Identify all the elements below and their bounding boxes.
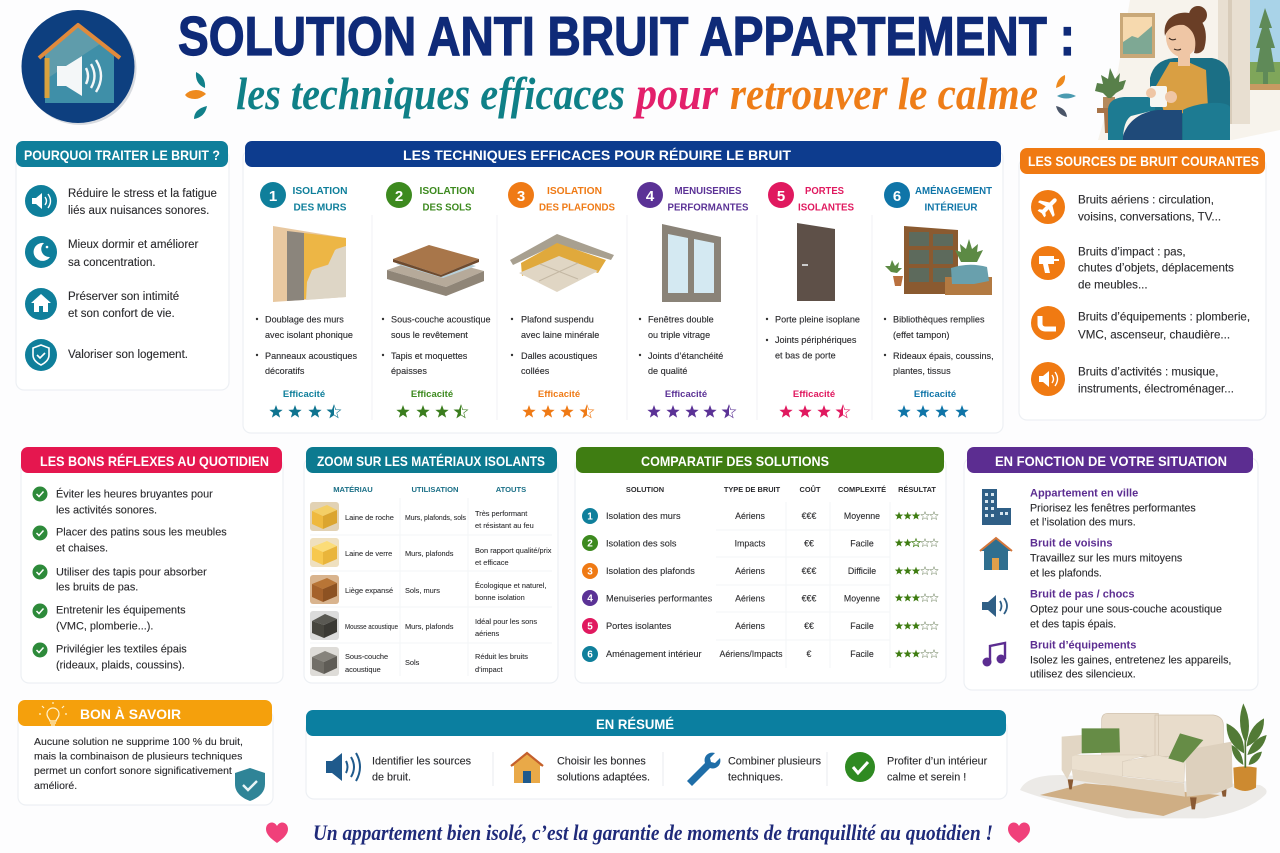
text: bruits impact: Bruits d’impact : pas, [1078, 246, 1186, 258]
technique 5: Efficacité [793, 389, 835, 400]
item: profiter: Profiter d’un intérieur [887, 756, 988, 768]
technique 2: DES SOLS [422, 202, 472, 214]
row 6: Aériens/Impacts [719, 649, 783, 659]
checklist: les bruits de pas. [56, 582, 138, 594]
technique 2: épaisses [391, 366, 427, 376]
panel: bons reflexes [21, 447, 283, 683]
item: combiner [687, 753, 822, 786]
table headers [626, 485, 936, 494]
heading [576, 447, 944, 473]
heading [18, 700, 272, 726]
text: bruits aeriens: voisins, conversations, TV... [1078, 210, 1221, 224]
icon: plane [1031, 190, 1065, 224]
subtitle [236, 68, 1038, 119]
panel: en fonction de votre situation [964, 447, 1258, 690]
technique 4: ou triple vitrage [648, 330, 710, 340]
item: bruit de pas: Bruit de pas / chocs [1030, 588, 1135, 600]
row 6: € [807, 649, 812, 659]
row 3: Aériens [735, 566, 766, 576]
row: sous-couche acoustique: acoustique [345, 665, 381, 674]
row 2: Impacts [735, 538, 766, 548]
technique 3: ISOLATION [547, 185, 602, 197]
panel: bon a savoir [18, 700, 273, 805]
icon: shield [25, 339, 57, 371]
item: bruit de voisins: et les plafonds. [1030, 568, 1102, 580]
row 1: Isolation des murs [606, 511, 681, 521]
technique 2: Sous-couche acoustique [391, 314, 491, 324]
icon: shield [235, 768, 265, 801]
item: appartement en ville: Priorisez les fenêtres performantes [1030, 502, 1196, 514]
text: stress: Réduire le stress et la fatigue [68, 188, 217, 200]
text: Aucune solution ne supprime 100 % du bruit, [34, 736, 243, 748]
checklist: Privilégier les textiles épais [56, 644, 187, 656]
heading: BON À SAVOIR [80, 706, 181, 722]
icon: bookcase, sofa and plant [885, 226, 992, 295]
row: laine de verre: Laine de verre [345, 549, 392, 558]
row 3: 3 [587, 566, 593, 578]
checklist: (rideaux, plaids, coussins). [56, 660, 185, 672]
row: sous-couche acoustique: Réduit les bruits [475, 652, 528, 661]
technique 1: ISOLATION [292, 185, 348, 197]
technique 6: Rideaux épais, coussins, [893, 351, 994, 361]
heading: POURQUOI TRAITER LE BRUIT ? [24, 147, 220, 163]
item: identifier: de bruit. [372, 772, 411, 784]
item: choisir [511, 753, 650, 784]
technique 2: Tapis et moquettes [391, 351, 468, 361]
text: bruits activites [1078, 366, 1234, 396]
row 1: Aériens [735, 511, 766, 521]
heading: EN RÉSUMÉ [596, 716, 674, 732]
item: bruit d'equipements [982, 640, 1231, 680]
row 3: €€€ [802, 566, 816, 576]
text: permet un confort sonore significativement [34, 765, 232, 777]
technique 1: décoratifs [265, 366, 305, 376]
subtitle: retrouver le calme [730, 68, 1038, 119]
checklist [32, 486, 227, 672]
row 5: Facile [850, 621, 874, 631]
row 5: 5 [587, 622, 593, 632]
row: laine de roche: et résistant au feu [475, 521, 534, 530]
text: bruits aeriens: Bruits aériens : circulation, [1078, 194, 1214, 206]
checklist: Entretenir les équipements [56, 604, 186, 616]
technique 6: (effet tampon) [893, 330, 949, 340]
technique 5: PORTES [805, 185, 844, 197]
icon: door [797, 223, 835, 301]
row: sous-couche acoustique: d’impact [475, 665, 503, 674]
technique 3: DES PLAFONDS [539, 202, 615, 214]
checklist: les activités sonores. [56, 504, 157, 516]
row 1: 1 [587, 512, 593, 522]
text: bruits impact: chutes d’objets, déplacements [1078, 262, 1234, 274]
item: combiner: techniques. [728, 772, 783, 784]
item: bruit d'equipements: Isolez les gaines, entretenez les appareils, [1030, 654, 1231, 666]
icon: heart right [1008, 822, 1030, 843]
technique 4: PERFORMANTES [668, 202, 748, 214]
text: bruits impact [1078, 246, 1234, 292]
row: sous-couche acoustique: Sous-couche [345, 652, 388, 661]
row 5: Portes isolantes [606, 621, 672, 631]
row 6 [582, 646, 938, 662]
panel: techniques efficaces [243, 141, 1003, 433]
panel: sources de bruit [1019, 148, 1266, 420]
technique 3: 3 [517, 188, 525, 205]
icon: pipe [1031, 306, 1065, 340]
icon: moon [25, 236, 57, 268]
heading [967, 447, 1253, 473]
technique 6: INTÉRIEUR [924, 200, 978, 214]
technique 3 [508, 182, 615, 418]
text: amélioré. [34, 780, 77, 792]
technique 4: 4 [646, 188, 655, 205]
item: bruit de voisins: Travaillez sur les murs mitoyens [1030, 552, 1182, 564]
panel: pourquoi traiter le bruit [16, 141, 229, 390]
technique 2: 2 [395, 188, 403, 205]
row 6: Facile [850, 649, 874, 659]
text: bruits activites: Bruits d’activités : musique, [1078, 366, 1218, 378]
icon: heart left [266, 822, 288, 843]
technique 4: de qualité [648, 366, 687, 376]
row: liege expanse: bonne isolation [475, 593, 525, 602]
item: identifier [326, 753, 472, 784]
technique 4 [637, 182, 748, 418]
table headers: RÉSULTAT [898, 485, 936, 494]
technique 6 [884, 182, 994, 418]
heading: ZOOM SUR LES MATÉRIAUX ISOLANTS [317, 453, 545, 469]
checklist: et chaises. [56, 542, 108, 554]
checklist: (VMC, plomberie...). [56, 620, 153, 632]
illustration: woman relaxing in armchair [1095, 0, 1280, 140]
row 4 [582, 590, 938, 606]
text [34, 736, 243, 792]
row: liege expanse: Écologique et naturel, [475, 581, 546, 590]
subtitle: pour [632, 68, 719, 119]
heading [245, 141, 1001, 167]
text: bruits aeriens [1078, 194, 1221, 224]
technique 6: Efficacité [914, 389, 956, 400]
row 6: 6 [587, 650, 593, 660]
row 6: Aménagement intérieur [606, 649, 702, 659]
row 5: €€ [804, 621, 814, 631]
item: bruit de voisins [980, 538, 1182, 580]
text: intimite: et son confort de vie. [68, 308, 175, 320]
row: liege expanse: Liège expansé [345, 586, 393, 595]
item: appartement en ville [982, 488, 1196, 528]
icon: speaker [1031, 362, 1065, 396]
row: liege expanse [310, 575, 546, 604]
technique 2: ISOLATION [420, 185, 474, 197]
technique 3: Plafond suspendu [521, 314, 594, 324]
text: sommeil [68, 239, 199, 269]
item: profiter [845, 752, 988, 784]
title: SOLUTION ANTI BRUIT APPARTEMENT : [178, 5, 1075, 67]
technique 5: Joints périphériques [775, 335, 857, 345]
table headers: ATOUTS [496, 485, 526, 494]
text: intimite: Préserver son intimité [68, 291, 179, 303]
technique 2: sous le revêtement [391, 330, 468, 340]
row 1 [582, 508, 938, 524]
row 1: €€€ [802, 511, 816, 521]
technique 3: Dalles acoustiques [521, 351, 598, 361]
heading [16, 141, 228, 167]
item: bruit de pas: et des tapis épais. [1030, 618, 1116, 630]
text: bruits equipements: Bruits d’équipements : plomberie, [1078, 310, 1250, 324]
row: liege expanse: Sols, murs [405, 586, 440, 595]
technique 2 [382, 182, 491, 418]
row 3 [582, 563, 938, 579]
row 5 [582, 618, 938, 634]
item: bruit d'equipements: utilisez des silencieux. [1030, 668, 1136, 680]
technique 1: Panneaux acoustiques [265, 351, 357, 361]
heading [21, 447, 282, 473]
heading: EN FONCTION DE VOTRE SITUATION [995, 453, 1227, 469]
row: sous-couche acoustique [310, 647, 528, 676]
row: mousse acoustique: Mousse acoustique [345, 622, 398, 631]
text: stress: liés aux nuisances sonores. [68, 205, 209, 217]
row: laine de roche: Laine de roche [345, 513, 394, 522]
technique 1: DES MURS [294, 202, 346, 214]
checklist: Placer des patins sous les meubles [56, 526, 227, 538]
row: laine de roche [310, 502, 534, 531]
row 3: Isolation des plafonds [606, 566, 695, 576]
table headers: COMPLEXITÉ [838, 485, 886, 494]
heading: LES BONS RÉFLEXES AU QUOTIDIEN [40, 453, 269, 469]
icon: house [25, 288, 57, 320]
row: laine de verre: et efficace [475, 558, 509, 567]
technique 6: AMÉNAGEMENT [915, 184, 993, 197]
technique 1 [256, 182, 357, 418]
technique 1: avec isolant phonique [265, 330, 353, 340]
heading [306, 447, 557, 473]
row 4: 4 [587, 594, 593, 604]
row: laine de verre: Bon rapport qualité/prix [475, 546, 552, 555]
table headers: MATÉRIAU [333, 485, 373, 494]
heading [1020, 148, 1265, 174]
panel: comparatif [575, 447, 946, 683]
row: laine de roche: Murs, plafonds, sols [405, 513, 466, 522]
item: choisir: solutions adaptées. [557, 772, 650, 784]
technique 6: Bibliothèques remplies [893, 314, 985, 324]
checklist: Éviter les heures bruyantes pour [56, 488, 213, 500]
technique 3: collées [521, 366, 550, 376]
technique 6: plantes, tissus [893, 366, 951, 376]
heading: LES TECHNIQUES EFFICACES POUR RÉDUIRE LE BRUIT [403, 147, 791, 163]
row 1: Moyenne [844, 511, 880, 521]
row: laine de verre: Murs, plafonds [405, 549, 454, 558]
technique 4: Fenêtres double [648, 314, 714, 324]
row: mousse acoustique: Idéal pour les sons [475, 617, 537, 626]
text: sommeil: sa concentration. [68, 257, 156, 269]
text: mais la combinaison de plusieurs techniques [34, 750, 242, 762]
icon: wall layers [273, 226, 346, 302]
item: bruit de pas: Optez pour une sous-couche acoustique [1030, 604, 1222, 616]
technique 5 [766, 182, 860, 418]
text: bruits impact: de meubles... [1078, 278, 1148, 292]
decorative sparks left and right of subtitle [185, 72, 1076, 119]
row 2: 2 [587, 538, 593, 550]
row 2: €€ [804, 538, 814, 548]
row: mousse acoustique [310, 611, 537, 640]
technique 3: Efficacité [538, 389, 580, 400]
heading [306, 710, 1006, 736]
technique 4: Joints d’étanchéité [648, 351, 723, 361]
icon: lightbulb [39, 702, 67, 725]
item: combiner: Combiner plusieurs [728, 756, 822, 768]
technique 5: ISOLANTES [798, 202, 854, 214]
technique 5: 5 [777, 188, 785, 205]
row 4: Moyenne [844, 594, 880, 604]
item: profiter: calme et serein ! [887, 772, 966, 784]
item: identifier: Identifier les sources [372, 756, 472, 768]
row: laine de verre [310, 538, 552, 567]
text: bruits equipements [1078, 310, 1250, 342]
table headers: COÛT [800, 485, 821, 494]
icon: window [662, 224, 721, 302]
technique 5: et bas de porte [775, 350, 836, 360]
technique 1: Doublage des murs [265, 314, 344, 324]
icon: ceiling [510, 234, 614, 292]
text: stress [68, 188, 217, 217]
icon: drill [1031, 246, 1065, 280]
item: appartement en ville: et l’isolation des murs. [1030, 516, 1136, 528]
row: mousse acoustique: Murs, plafonds [405, 622, 454, 631]
item: bruit de pas [982, 588, 1222, 630]
technique 6: 6 [893, 188, 901, 205]
row 4: €€€ [802, 594, 816, 604]
table headers: UTILISATION [411, 485, 459, 494]
heading: COMPARATIF DES SOLUTIONS [641, 453, 829, 469]
item: bruit de voisins: Bruit de voisins [1030, 538, 1113, 550]
table headers: TYPE DE BRUIT [724, 485, 781, 494]
technique 3: avec laine minérale [521, 330, 599, 340]
technique 4: Efficacité [665, 389, 707, 400]
illustration: sofa and plant [1020, 703, 1267, 818]
row: mousse acoustique: aériens [475, 629, 500, 638]
technique 1: Efficacité [283, 389, 325, 400]
row 2 [582, 535, 938, 551]
technique 1: 1 [269, 188, 277, 205]
row: laine de roche: Très performant [475, 509, 527, 518]
icon: floor layers [387, 245, 484, 296]
row: sous-couche acoustique: Sols [405, 658, 420, 667]
table headers [333, 485, 526, 494]
row 2: Facile [850, 538, 874, 548]
text: logement: Valoriser son logement. [68, 349, 188, 361]
panel: materiaux isolants [304, 447, 558, 683]
text: bruits activites: instruments, électroménager... [1078, 382, 1234, 396]
row 2: Isolation des sols [606, 538, 677, 548]
text: sommeil: Mieux dormir et améliorer [68, 239, 199, 251]
subtitle: les techniques efficaces [236, 68, 625, 119]
table headers: SOLUTION [626, 485, 664, 494]
row 4: Aériens [735, 594, 766, 604]
row 3: Difficile [848, 566, 876, 576]
icon: speaker [25, 185, 57, 217]
item: bruit d'equipements: Bruit d’équipements [1030, 640, 1136, 652]
item: appartement en ville: Appartement en ville [1030, 488, 1138, 500]
footer slogan: Un appartement bien isolé, c’est la garantie de moments de tranquillité au quotidien ! [313, 820, 993, 845]
logo: house with speaker [22, 10, 136, 125]
item: choisir: Choisir les bonnes [557, 756, 646, 768]
text: intimite [68, 291, 179, 320]
row 5: Aériens [735, 621, 766, 631]
panel: en resume [306, 710, 1007, 799]
technique 2: Efficacité [411, 389, 453, 400]
technique 4: MENUISERIES [674, 185, 742, 197]
row 4: Menuiseries performantes [606, 594, 713, 604]
text: bruits equipements: VMC, ascenseur, chaudière... [1078, 328, 1230, 342]
technique 5: Porte pleine isoplane [775, 314, 860, 324]
checklist: Utiliser des tapis pour absorber [56, 566, 207, 578]
